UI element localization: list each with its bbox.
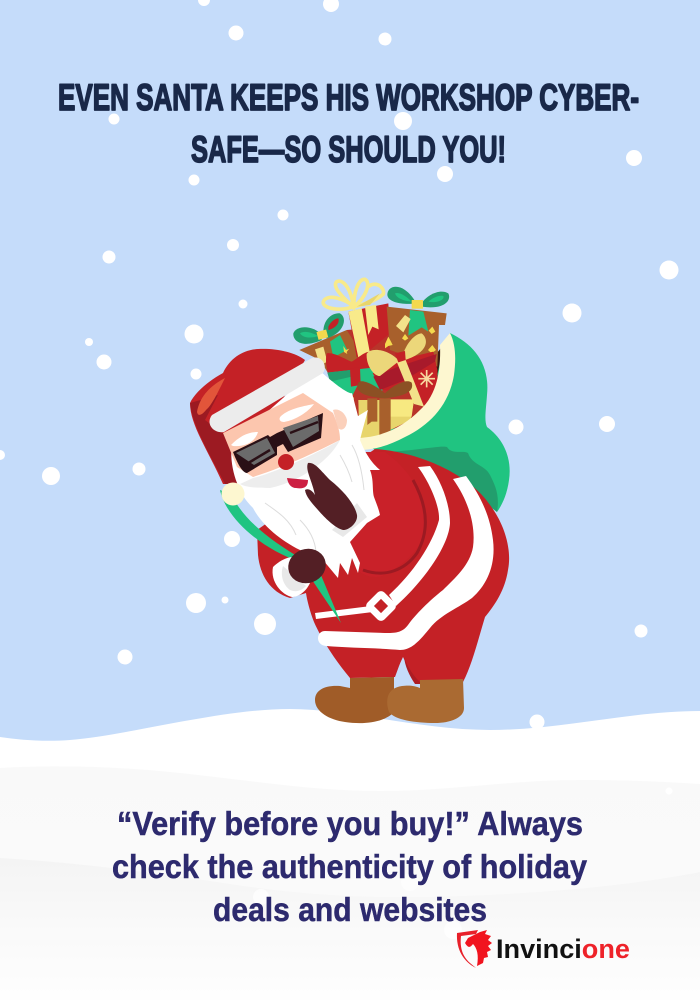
body message: “Verify before you buy!” Always: [117, 805, 583, 842]
sunglasses: [233, 413, 323, 473]
santa suit body: [257, 449, 509, 684]
gift pile base fill: [333, 327, 437, 437]
front brown bow gift: [357, 381, 414, 441]
eyebrows: [231, 404, 314, 446]
hat pom-pom: [222, 482, 244, 506]
boots: [315, 677, 464, 723]
green hat tip and sash: [220, 490, 341, 623]
santa illustration: [190, 279, 510, 723]
mouth: [287, 478, 308, 488]
logo wordmark: Invincione: [496, 934, 630, 964]
dark sack interior: [403, 345, 443, 423]
face: [223, 393, 347, 488]
gift sack: [360, 333, 510, 512]
title: SAFE—SO SHOULD YOU!: [191, 129, 506, 170]
back left gift, green ribbon: [293, 313, 362, 382]
small red and green gift: [326, 351, 383, 407]
red gift with cream bow: [367, 333, 438, 407]
falling snowflakes: [0, 0, 678, 730]
belt buckle: [364, 589, 398, 623]
nose: [278, 454, 294, 470]
gift pile: [293, 279, 449, 441]
lower glove and cuff: [273, 544, 331, 597]
body message: [112, 805, 588, 928]
white suit stripes: [315, 466, 494, 650]
snowflake: [418, 370, 435, 387]
body message: deals and websites: [213, 891, 487, 928]
hat brim: [210, 357, 325, 432]
logo shield icon: [457, 930, 492, 968]
hat: [190, 349, 305, 484]
back middle gift, cream ribbon: [323, 279, 390, 357]
sack rim: [358, 333, 455, 450]
logo: Invincione: [457, 930, 630, 968]
pointing hand: [305, 463, 367, 537]
back right gift, green ribbon: [385, 287, 449, 367]
snow ground: [0, 709, 700, 1000]
title: [58, 77, 639, 170]
beard: [231, 368, 380, 578]
body message: check the authenticity of holiday: [112, 848, 588, 885]
